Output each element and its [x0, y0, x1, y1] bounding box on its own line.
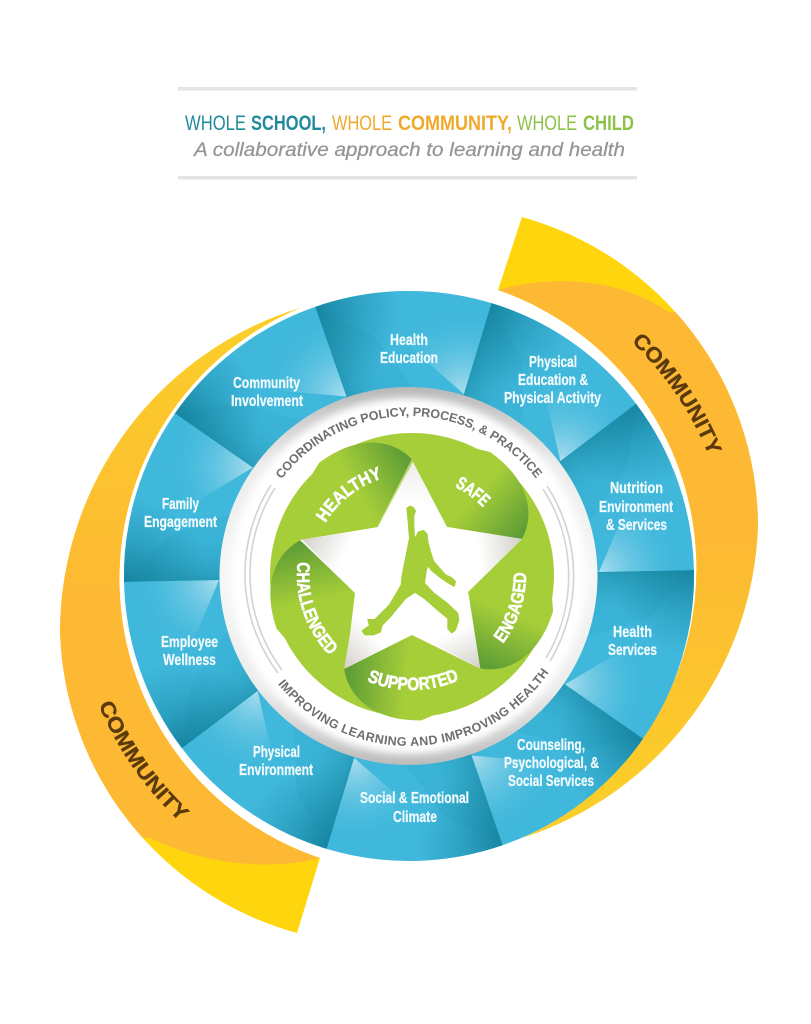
sector: health services: Health: [613, 624, 652, 641]
ribbon folds: [238, 423, 576, 753]
star: [295, 456, 522, 685]
sector: employee wellness: [72, 521, 301, 755]
sector: employee wellness: Employee: [161, 634, 218, 651]
title: SCHOOL,: [251, 112, 326, 135]
word: healthy: HEALTHY: [315, 466, 379, 522]
title: WHOLE: [185, 112, 246, 135]
title: COMMUNITY,: [398, 112, 512, 135]
sector: social and emotional climate: Climate: [393, 809, 437, 826]
sector: social and emotional climate: Social & Emotional: [360, 790, 469, 807]
sector: social and emotional climate: [290, 707, 509, 907]
white coordinating ring: [220, 387, 598, 765]
word: supported: SUPPORTED: [368, 670, 458, 690]
title: [185, 112, 634, 135]
sector: counseling: Counseling,: [517, 737, 585, 754]
header block: [178, 87, 637, 180]
community band: left: [60, 308, 320, 933]
sector: health education: Education: [380, 350, 438, 367]
sector: employee wellness: Wellness: [163, 652, 216, 669]
sector: family engagement: Engagement: [144, 514, 218, 531]
sector: nutrition: Environment: [599, 499, 674, 516]
sector: community involvement: [168, 267, 394, 500]
sector: nutrition: Nutrition: [610, 480, 663, 497]
label: community right: COMMUNITY: [634, 334, 722, 451]
sector: health education: Health: [390, 332, 428, 349]
sector: physical education: Physical: [529, 354, 577, 371]
title: CHILD: [583, 112, 634, 135]
blue wheel of ten components: [72, 245, 746, 907]
title: WHOLE: [332, 112, 392, 135]
sector: physical education: Physical Activity: [504, 390, 601, 407]
sector: nutrition: [517, 397, 746, 631]
sector: community involvement: Involvement: [231, 393, 304, 410]
jumping figure: [363, 507, 458, 634]
sector: family engagement: [115, 404, 269, 587]
green star circle: [270, 433, 554, 720]
sector: physical education: Education &: [518, 372, 588, 389]
sector: family engagement: Family: [162, 496, 199, 513]
word: engaged: ENGAGED: [493, 572, 526, 644]
ring text: bottom: IMPROVING LEARNING AND IMPROVING HEALTH: [278, 668, 548, 746]
sector: physical environment: Physical: [253, 744, 300, 761]
sector: health education: [309, 245, 528, 445]
label: community left: COMMUNITY: [100, 702, 190, 818]
title: WHOLE: [517, 112, 577, 135]
ring text: top: COORDINATING POLICY, PROCESS, & PRACTICE: [276, 407, 542, 478]
sector: counseling: Psychological, &: [504, 755, 599, 772]
sector: nutrition: & Services: [606, 517, 667, 534]
sector: physical environment: Environment: [239, 762, 314, 779]
sector: counseling: [424, 652, 650, 885]
subtitle: A collaborative approach to learning and health: [193, 140, 625, 161]
sector: community involvement: Community: [233, 375, 300, 392]
sector: counseling: Social Services: [508, 773, 594, 790]
sector: health services: Services: [608, 642, 657, 659]
word: safe: SAFE: [456, 477, 492, 508]
community band: right: [498, 217, 758, 838]
sector: physical environment: [158, 659, 373, 855]
sector: physical education: [445, 297, 660, 493]
word: challenged: CHALLENGED: [296, 562, 337, 654]
sector: health services: [549, 565, 703, 748]
